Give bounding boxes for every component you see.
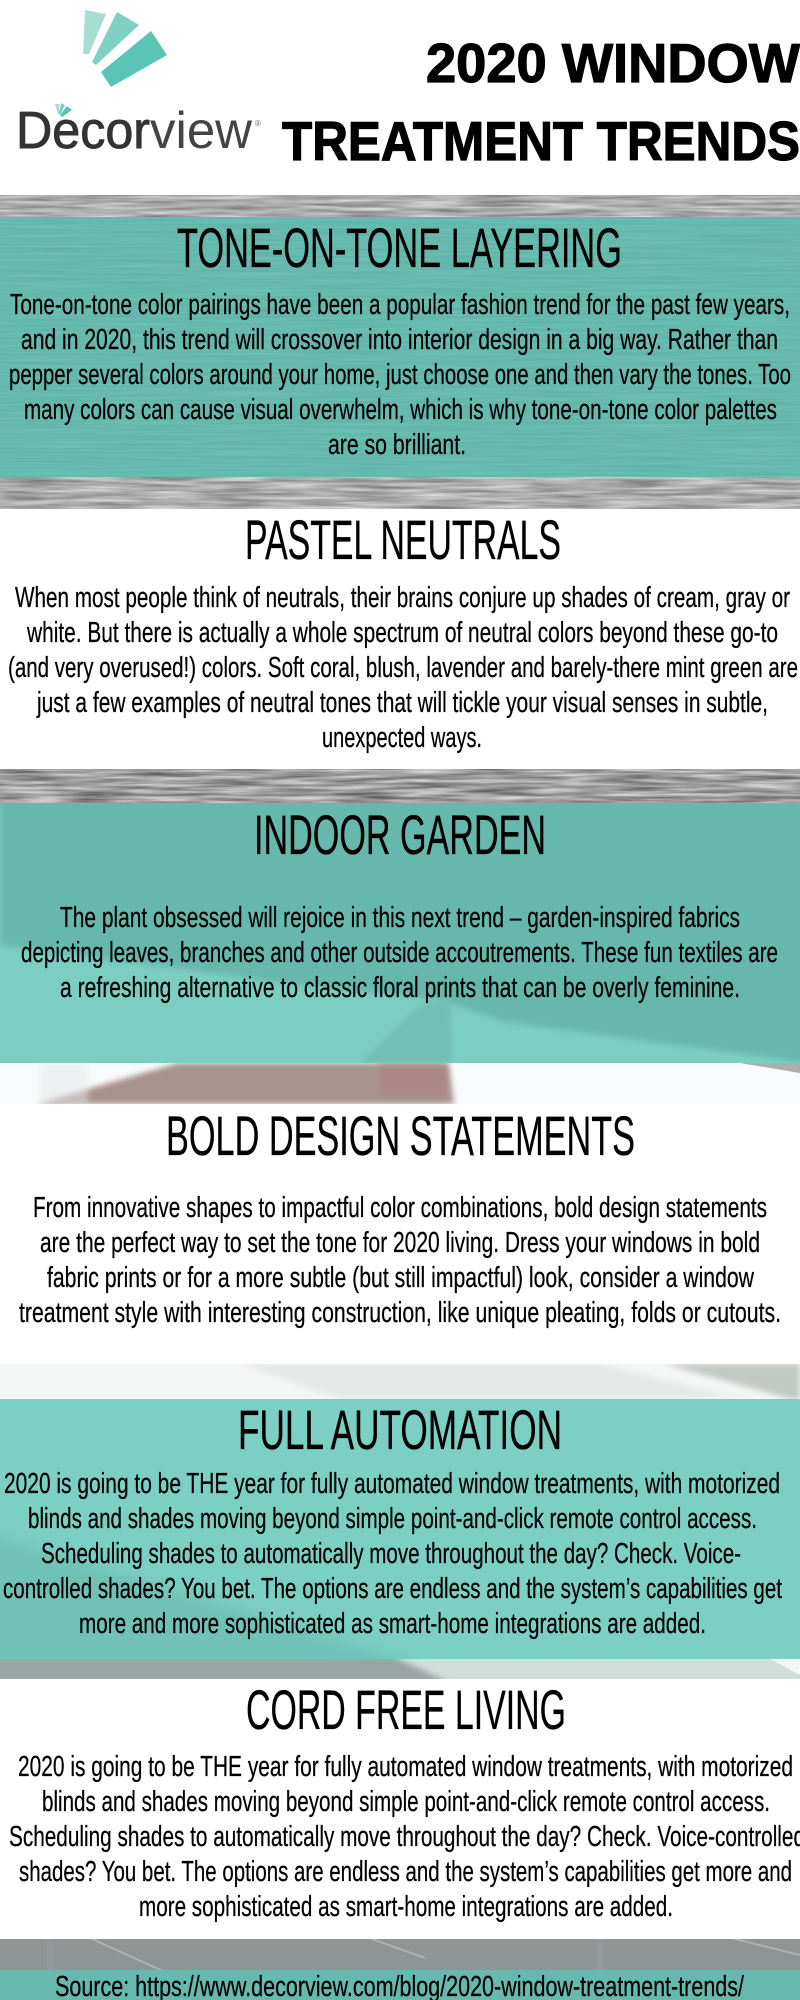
photo strip [0, 1939, 800, 1970]
body text [3, 1468, 782, 1640]
object shadow inside overlay [365, 1003, 452, 1062]
body text [8, 582, 798, 754]
grey fabric background [0, 195, 800, 509]
body text: unexpected ways. [322, 722, 482, 754]
logo: Decorview [16, 10, 261, 160]
teal overlay [0, 1399, 800, 1659]
panel: bold design statements [19, 1104, 781, 1329]
teal overlay [0, 217, 800, 477]
shadow inside overlay [0, 1539, 391, 1659]
panel: pastel neutrals [8, 508, 798, 754]
teal overlay [0, 803, 800, 1063]
logo wordmark: Decor [16, 102, 150, 160]
heading: CORD FREE LIVING [246, 1678, 566, 1741]
panel: full automation [0, 1364, 800, 1685]
heading: PASTEL NEUTRALS [245, 508, 561, 571]
heading: INDOOR GARDEN [254, 803, 546, 866]
logo wordmark: ® [255, 119, 261, 128]
body text [9, 1751, 800, 1923]
panel: cord free living [9, 1678, 800, 1923]
icon: fan of three teal shades [83, 10, 167, 87]
fabric shadow inside overlay [0, 790, 800, 1063]
header [16, 10, 800, 172]
logo wordmark [16, 102, 261, 160]
grey fabric strip [0, 769, 800, 803]
teal overlay [0, 1970, 800, 2000]
logo wordmark: view [150, 102, 252, 160]
body text [21, 902, 778, 1004]
title: 2020 WINDOW [426, 32, 800, 94]
heading: FULL AUTOMATION [238, 1398, 562, 1461]
title [282, 32, 800, 172]
photo background [0, 1364, 800, 1685]
panel: indoor garden [0, 769, 800, 1104]
photo background [34, 1063, 800, 1104]
footer: source [0, 1939, 800, 2000]
body text: are so brilliant. [328, 429, 466, 461]
body text [19, 1192, 781, 1329]
body text [9, 289, 791, 461]
panel: tone-on-tone layering [0, 195, 800, 509]
